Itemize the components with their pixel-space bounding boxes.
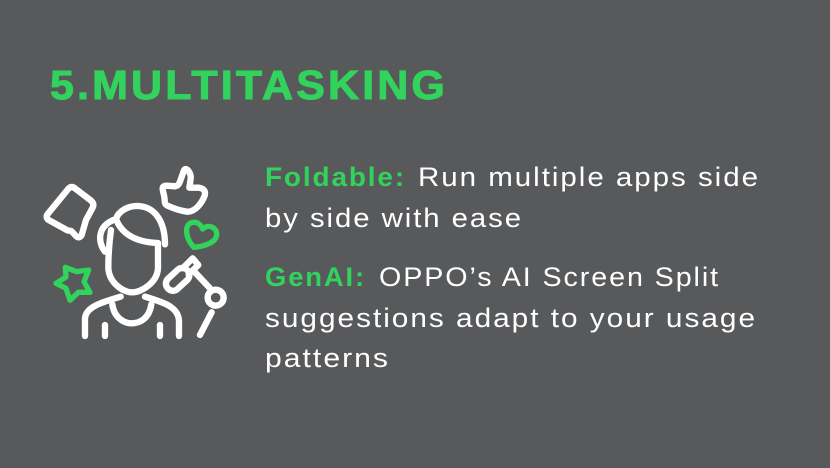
text block: genai: OPPO’s AI Screen Split bbox=[379, 262, 720, 292]
icon: tool bbox=[163, 258, 224, 335]
text block: genai: GenAI: bbox=[265, 262, 366, 292]
icon: thumbs up bbox=[163, 169, 205, 212]
icon: heart bbox=[187, 222, 217, 247]
text block: foldable bbox=[265, 162, 760, 233]
text block: foldable: Foldable: bbox=[265, 162, 406, 192]
icon: speech bubble bbox=[47, 187, 93, 237]
shoulders and collar bbox=[85, 297, 179, 336]
face bbox=[108, 230, 158, 292]
text block: genai: patterns bbox=[265, 343, 390, 373]
hair bbox=[100, 206, 165, 252]
icon: person with social reactions bbox=[47, 169, 224, 336]
text block: genai bbox=[265, 262, 757, 373]
icon: star bbox=[56, 267, 90, 300]
text block: foldable: Run multiple apps side bbox=[418, 162, 760, 192]
text block: genai: suggestions adapt to your usage bbox=[265, 303, 757, 333]
person bbox=[85, 206, 179, 336]
text block: foldable: by side with ease bbox=[265, 203, 523, 233]
title: 5.MULTITASKING bbox=[50, 62, 448, 108]
